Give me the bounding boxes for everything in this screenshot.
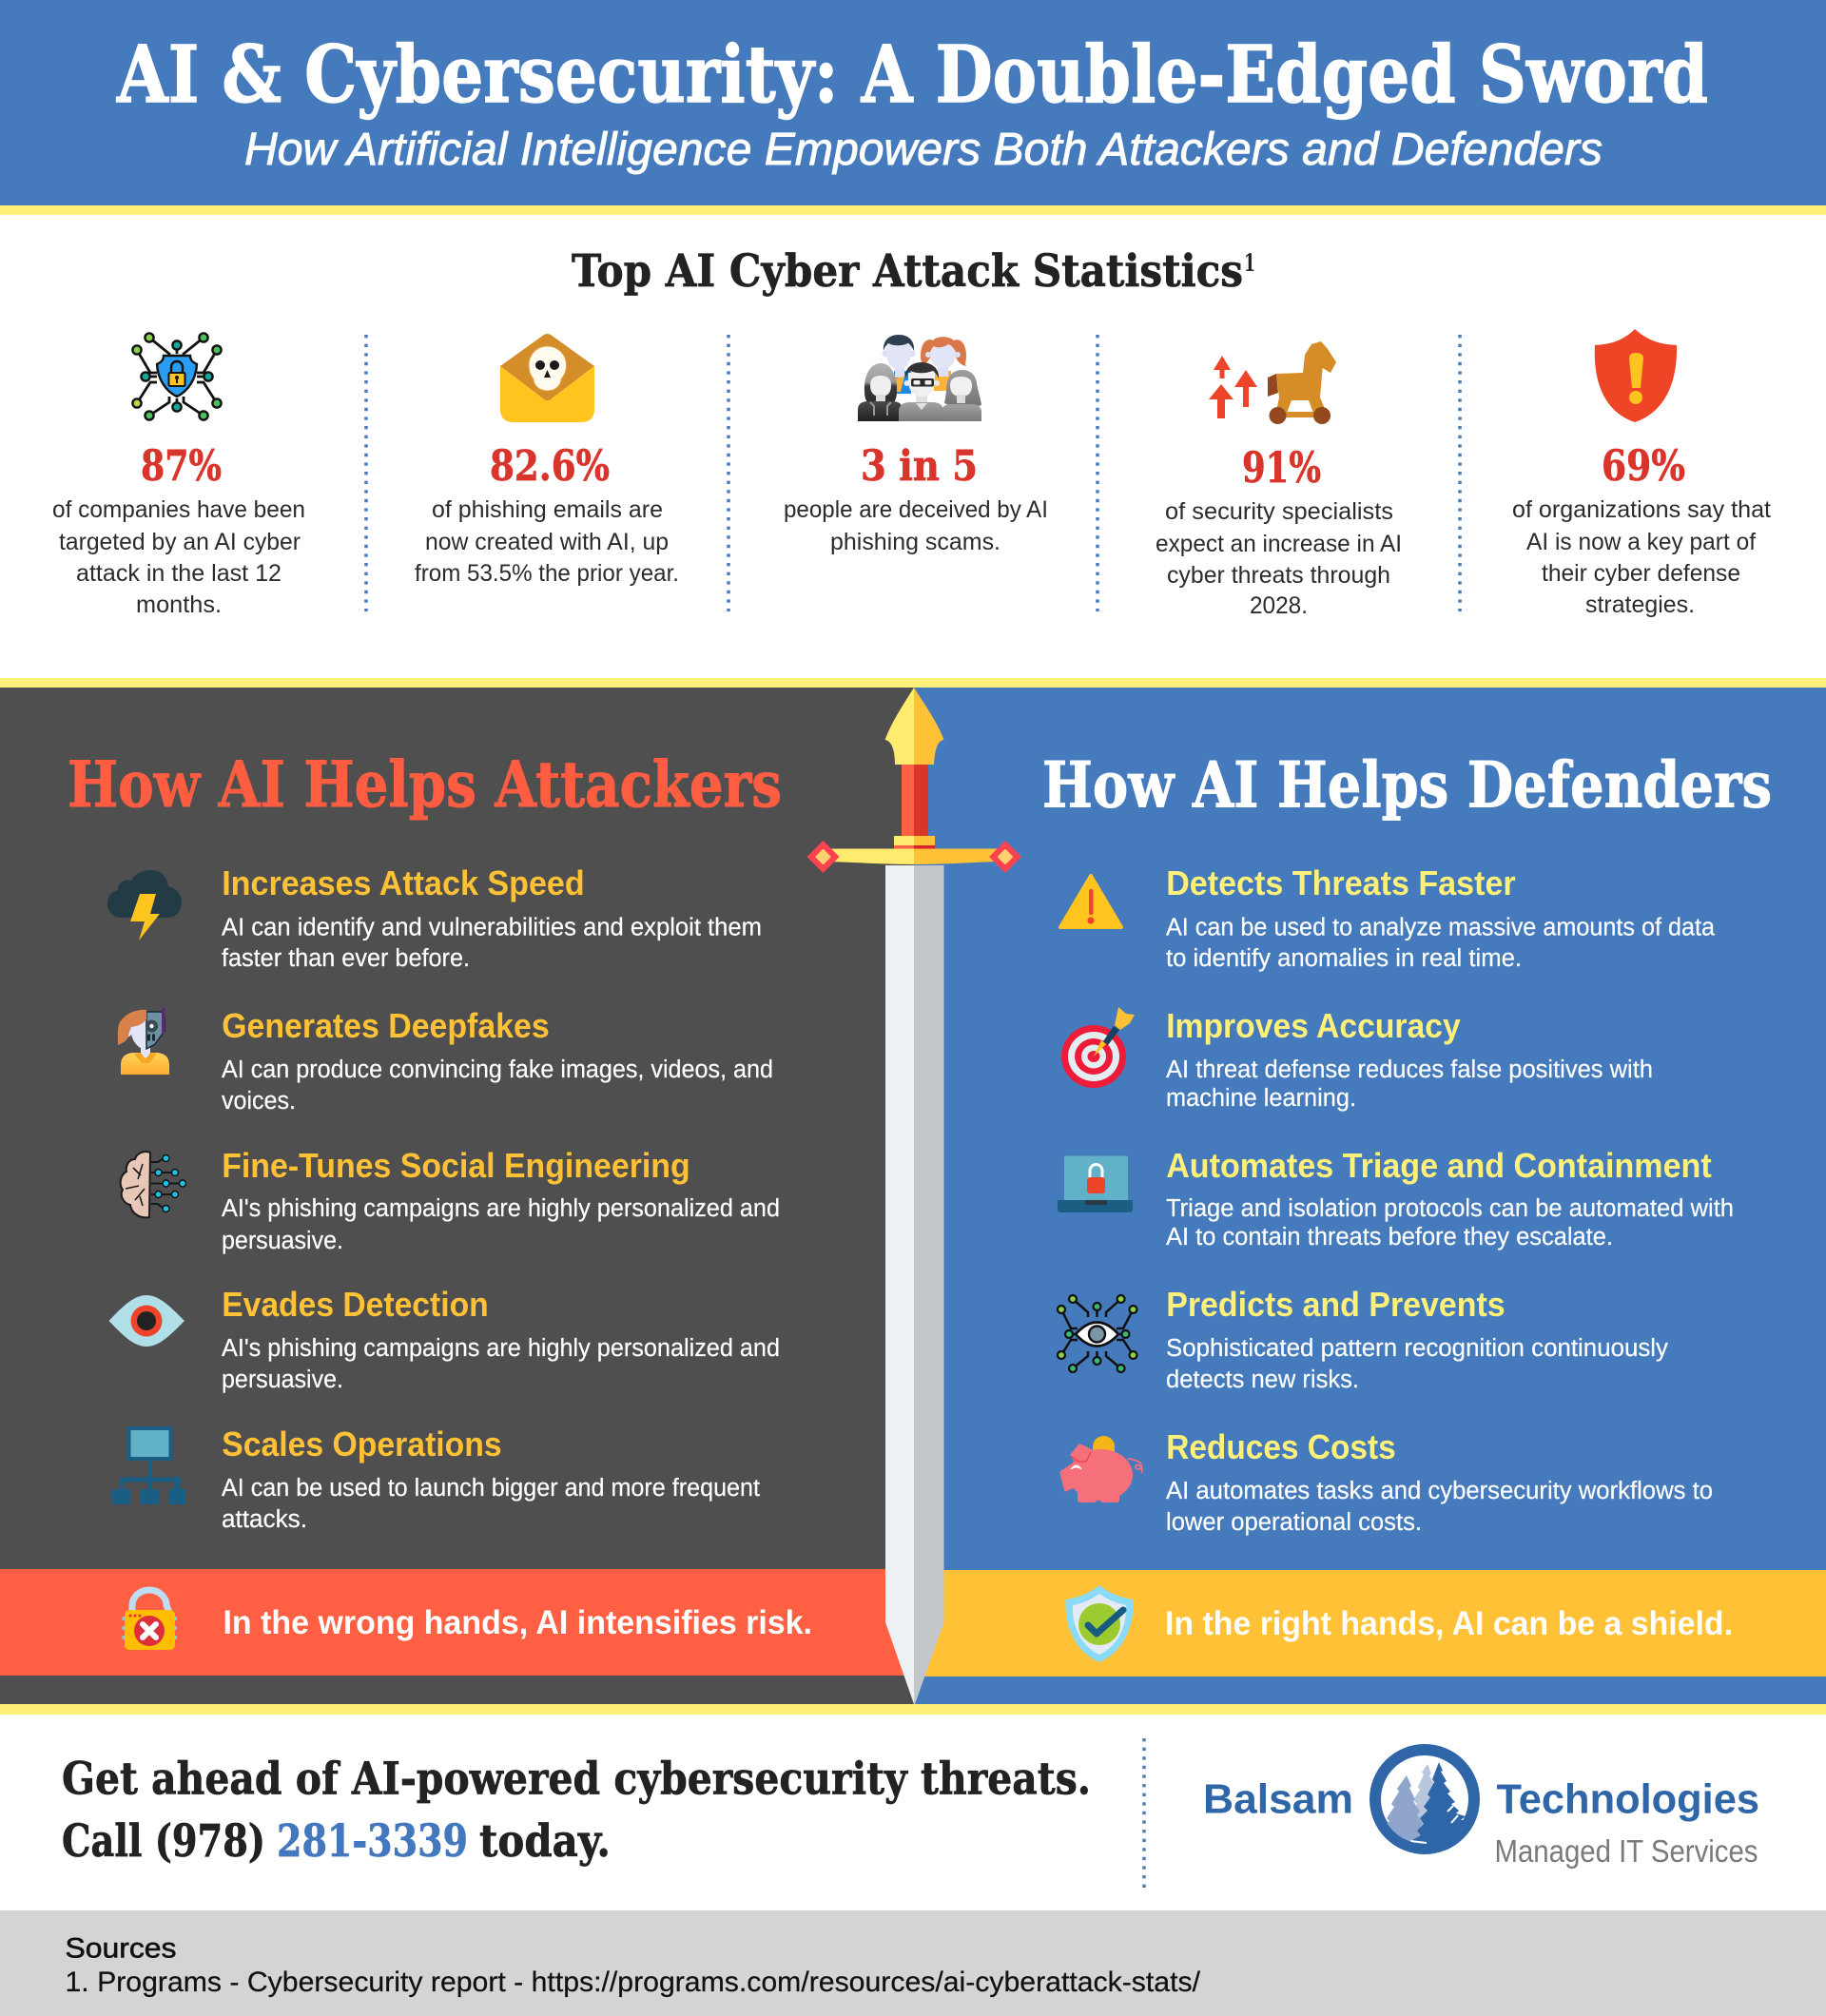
- icon: network: [112, 1428, 186, 1504]
- banner: right hands: [914, 1570, 1826, 1677]
- call to action text: 281-3339: [277, 1815, 468, 1868]
- item: generates deepfakes: voices.: [222, 1088, 296, 1115]
- sword: [808, 688, 1020, 1704]
- item: automates triage and containment: Triage and isolation protocols can be automated with: [1166, 1195, 1734, 1222]
- item: predicts and prevents: detects new risks.: [1166, 1367, 1359, 1393]
- item: predicts and prevents: Sophisticated pattern recognition continuously: [1166, 1335, 1668, 1362]
- right person: [942, 370, 981, 421]
- sword pommel: [884, 688, 943, 765]
- icon: circuit eye: [1058, 1295, 1137, 1372]
- item: increases attack speed: [222, 863, 762, 972]
- item: predicts and prevents: Predicts and Prevents: [1166, 1285, 1505, 1324]
- item: fine-tunes social engineering: persuasive.: [222, 1228, 343, 1254]
- banner text: In the wrong hands, AI intensifies risk.: [223, 1604, 812, 1641]
- item: scales operations: [222, 1425, 760, 1533]
- item: increases attack speed: faster than ever before.: [222, 945, 470, 972]
- stat: 69%: their cyber defense: [1542, 560, 1740, 587]
- front left person: [858, 363, 903, 421]
- item: generates deepfakes: AI can produce convincing fake images, videos, and: [222, 1056, 773, 1083]
- item: reduces costs: AI automates tasks and cybersecurity workflows to: [1166, 1478, 1713, 1504]
- logo: Balsam Technologies: Managed IT Services: [1495, 1833, 1758, 1869]
- stat: 82.6%: [415, 442, 679, 587]
- item: improves accuracy: machine learning.: [1166, 1085, 1356, 1112]
- sword grip: [894, 765, 935, 848]
- stat: 87%: targeted by an AI cyber: [59, 529, 301, 555]
- item: automates triage and containment: Automates Triage and Containment: [1166, 1146, 1712, 1185]
- stat: 69%: strategies.: [1585, 591, 1695, 618]
- item: evades detection: Evades Detection: [222, 1285, 489, 1324]
- banner text: In the right hands, AI can be a shield.: [1165, 1605, 1733, 1642]
- icon: deepfake face: [118, 1008, 169, 1075]
- banner: wrong hands: [0, 1569, 914, 1676]
- item: evades detection: AI's phishing campaigns are highly personalized and: [222, 1335, 780, 1362]
- item: reduces costs: [1166, 1427, 1713, 1536]
- stat: 91%: 2028.: [1250, 592, 1308, 619]
- stat: 69%: of organizations say that: [1512, 496, 1771, 523]
- stat: 87%: attack in the last 12: [76, 560, 282, 587]
- source citation: 1. Programs - Cybersecurity report - https://programs.com/resources/ai-cyberattack-stats/: [65, 1967, 1201, 1998]
- back woman: [921, 337, 966, 391]
- stat: 87%: [52, 442, 305, 618]
- stat: 3 in 5: people are deceived by AI: [784, 496, 1048, 523]
- panel: attackers: [0, 688, 914, 1704]
- panel: call to action: [62, 1738, 1759, 1890]
- panel: header: [0, 0, 1826, 215]
- item: detects threats faster: [1166, 863, 1716, 972]
- stat: 69%: AI is now a key part of: [1526, 529, 1756, 555]
- logo: Balsam Technologies: Technologies: [1497, 1776, 1759, 1822]
- item: generates deepfakes: Generates Deepfakes: [222, 1006, 550, 1045]
- item: detects threats faster: Detects Threats Faster: [1166, 863, 1516, 902]
- item: reduces costs: lower operational costs.: [1166, 1509, 1422, 1536]
- call to action text: Get ahead of AI-powered cybersecurity threats.: [62, 1754, 1091, 1805]
- call to action text: today.: [479, 1815, 611, 1868]
- item: evades detection: persuasive.: [222, 1367, 343, 1393]
- heading: attackers: How AI Helps Attackers: [68, 747, 782, 822]
- call to action text: [62, 1754, 1091, 1868]
- item: detects threats faster: to identify anomalies in real time.: [1166, 945, 1522, 972]
- item: generates deepfakes: [222, 1006, 773, 1115]
- stat: 3 in 5: phishing scams.: [830, 529, 1000, 555]
- item: reduces costs: Reduces Costs: [1166, 1427, 1396, 1466]
- item: fine-tunes social engineering: [222, 1146, 780, 1254]
- stat: 91%: cyber threats through: [1167, 562, 1390, 589]
- icon: target and dart: [1061, 1007, 1135, 1088]
- icon: arrows and trojan horse: [1209, 341, 1336, 424]
- sword blade: [885, 865, 943, 1704]
- stat: 3 in 5: 3 in 5: [861, 442, 978, 491]
- item: fine-tunes social engineering: AI's phishing campaigns are highly personalized and: [222, 1195, 780, 1222]
- item: scales operations: AI can be used to launch bigger and more frequent: [222, 1475, 760, 1502]
- item: improves accuracy: Improves Accuracy: [1166, 1006, 1461, 1045]
- item: predicts and prevents: [1166, 1285, 1668, 1393]
- icon: locked laptop: [1058, 1156, 1133, 1212]
- icon: warning shield: [1595, 329, 1677, 422]
- sword crossguard: [808, 842, 1020, 872]
- stat: 82.6%: now created with AI, up: [425, 529, 669, 555]
- item: scales operations: attacks.: [222, 1506, 307, 1533]
- stat: 69%: [1512, 442, 1771, 618]
- item: increases attack speed: AI can identify and vulnerabilities and exploit them: [222, 915, 762, 941]
- item: scales operations: Scales Operations: [222, 1425, 502, 1464]
- stat: 91%: of security specialists: [1165, 498, 1393, 525]
- logo mark: trees in ring: [1375, 1750, 1474, 1854]
- heading footnote mark: 1: [1244, 249, 1255, 277]
- stat: 91%: 91%: [1242, 444, 1321, 493]
- icon: group of people: [858, 335, 981, 421]
- panel: statistics: [52, 245, 1771, 619]
- stat: 91%: expect an increase in AI: [1156, 531, 1402, 557]
- icon: warning triangle: [1060, 876, 1121, 927]
- stat: 87%: months.: [136, 591, 222, 618]
- stat: 3 in 5: [784, 442, 1048, 555]
- item: improves accuracy: [1166, 1006, 1653, 1112]
- icon: network shield: [132, 333, 222, 420]
- stat: 87%: of companies have been: [52, 496, 305, 523]
- icon: skull email: [500, 334, 594, 422]
- back man: [883, 335, 915, 394]
- statistics heading: Top AI Cyber Attack Statistics: [572, 245, 1243, 298]
- item: fine-tunes social engineering: Fine-Tunes Social Engineering: [222, 1146, 690, 1185]
- logo: Balsam Technologies: [1203, 1750, 1759, 1869]
- stat: 82.6%: 82.6%: [490, 442, 610, 491]
- item: automates triage and containment: AI to contain threats before they escalate.: [1166, 1224, 1613, 1250]
- item: improves accuracy: AI threat defense reduces false positives with: [1166, 1056, 1653, 1083]
- item: automates triage and containment: [1166, 1146, 1734, 1250]
- stat: 82.6%: of phishing emails are: [432, 496, 663, 523]
- stat: 91%: [1156, 444, 1402, 619]
- icon: piggy bank: [1060, 1436, 1142, 1502]
- sources heading: Sources: [65, 1932, 177, 1965]
- item: evades detection: [222, 1285, 780, 1393]
- panel: sources: [0, 1910, 1826, 2016]
- stat: 87%: 87%: [141, 442, 222, 491]
- subtitle: How Artificial Intelligence Empowers Both Attackers and Defenders: [244, 125, 1603, 175]
- item: increases attack speed: Increases Attack Speed: [222, 863, 585, 902]
- icon: eye: [108, 1295, 185, 1347]
- item: detects threats faster: AI can be used to analyze massive amounts of data: [1166, 915, 1716, 941]
- call to action text: Call (978): [62, 1815, 265, 1868]
- logo: Balsam Technologies: Balsam: [1203, 1776, 1353, 1822]
- stat: 82.6%: from 53.5% the prior year.: [415, 560, 679, 587]
- front center person: [899, 362, 943, 421]
- icon: check shield: [1065, 1585, 1134, 1662]
- panel: defenders: [914, 688, 1826, 1704]
- icon: storm cloud: [107, 870, 182, 940]
- icon: broken lock: [122, 1590, 177, 1650]
- stat: 69%: 69%: [1602, 442, 1685, 491]
- icon: brain circuit: [121, 1152, 186, 1217]
